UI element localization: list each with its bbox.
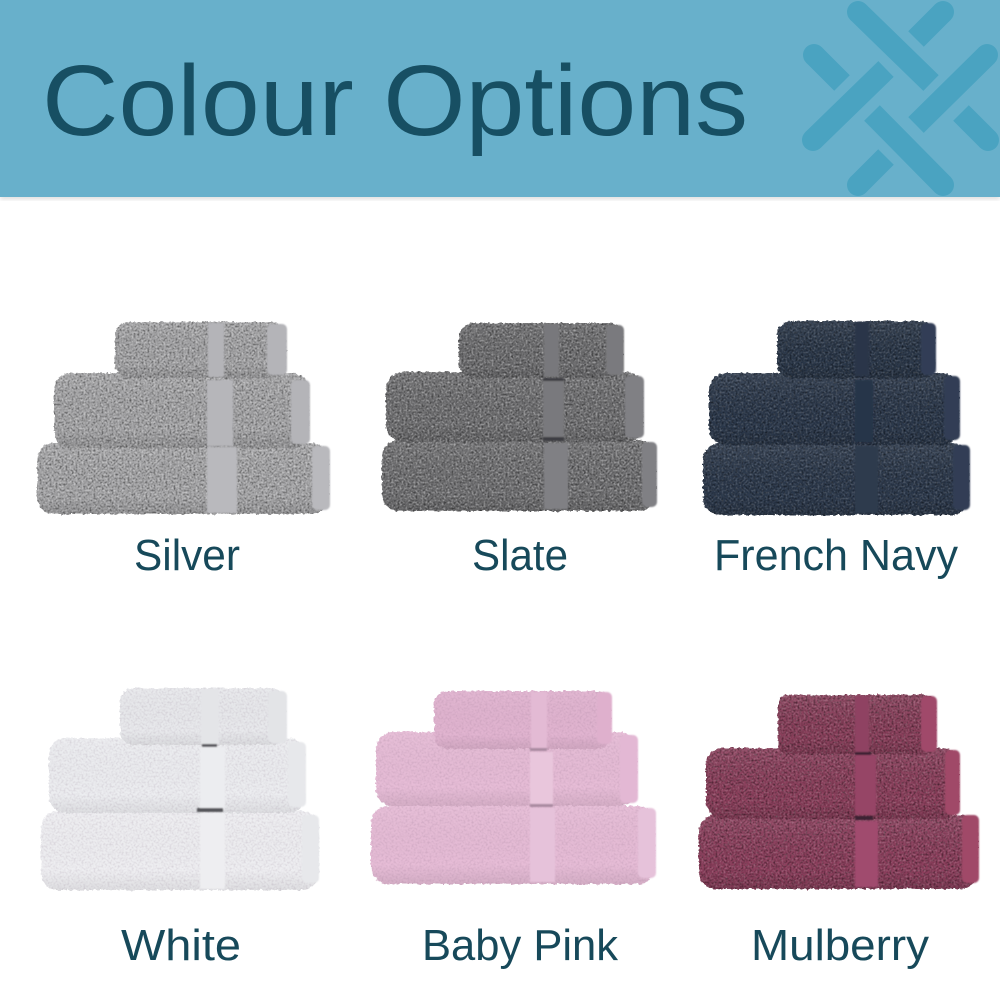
label: White: White: [121, 921, 241, 970]
towel stack: french navy: [703, 321, 970, 515]
label: Baby Pink: Baby Pink: [422, 921, 619, 970]
icon: woven cross logo: [802, 1, 999, 196]
label: French Navy: French Navy: [714, 531, 958, 580]
header banner: [0, 0, 1000, 199]
towel stack: mulberry: [699, 695, 979, 889]
towel stack: silver: [37, 322, 330, 514]
towel stack: white: [41, 688, 319, 890]
title: Colour Options: [42, 45, 748, 157]
towel stack: slate: [382, 323, 657, 511]
towel stack: baby pink: [371, 691, 656, 884]
label: Silver: Silver: [134, 531, 240, 580]
label: Mulberry: Mulberry: [751, 921, 929, 970]
label: Slate: Slate: [472, 531, 568, 580]
